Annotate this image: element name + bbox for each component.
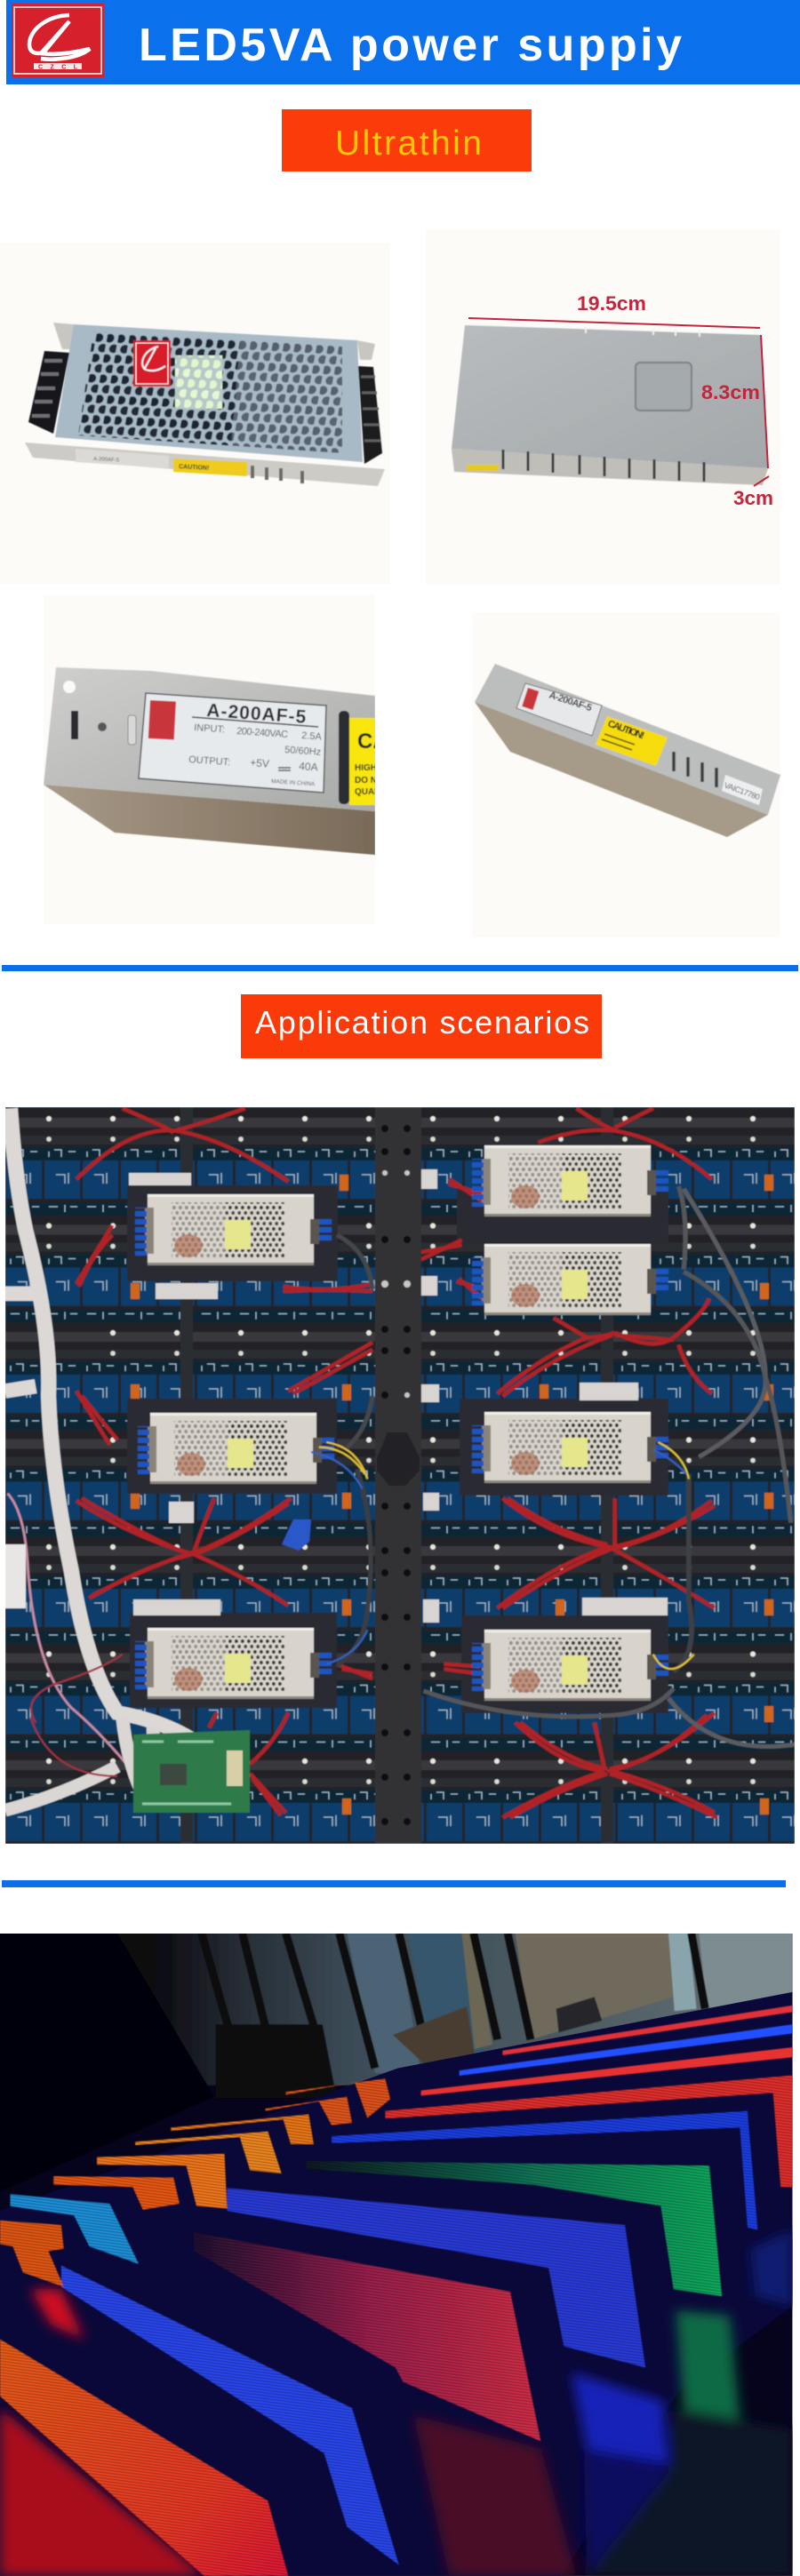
product photo: dimensions [426,229,780,585]
side label: A-200AF-5 [548,690,593,714]
side label [516,683,602,736]
heading: Application scenarios: Application scenarios [255,1004,589,1041]
display: mid blue [227,2188,645,2368]
title: LED5VA power suppiy [139,20,682,71]
serial tag [722,775,763,805]
power supply: lower right [472,1630,668,1701]
dimension lines [468,318,769,486]
side caution sticker [596,716,668,766]
product photo: top view: CAUTION! [179,464,209,472]
orange chips [131,1175,773,1814]
power supply: upper left [135,1194,332,1265]
dark mounting plates [127,1185,668,1713]
dimension label: height: 8.3cm [701,381,760,403]
display: green [306,2161,722,2296]
product label [139,693,326,793]
side caution sticker: CAUTION! [606,719,645,742]
caution sticker: HIGH [355,763,377,773]
display: front orange [0,2339,288,2576]
product label: 40A [299,760,318,773]
product label: 2.5A [301,730,323,743]
caution sticker: DO N [355,776,377,786]
display: back blue [332,2111,757,2229]
product photo: top view [0,243,390,584]
dimension label: width: 19.5cm [577,292,646,315]
application photo: wired LED cabinet [5,1107,795,1844]
product label: 200-240VAC [236,726,289,740]
product label: OUTPUT: [188,754,231,768]
dimension label: depth: 3cm [733,487,773,509]
product label: 50/60Hz [284,745,322,758]
white junction block [5,1544,26,1608]
product photo: label closeup [44,666,375,856]
logo [12,4,104,77]
LED display showcase photo [0,1934,792,2576]
blue connector [282,1519,311,1551]
product label: +5V [250,756,269,770]
red wire bundles [76,1108,716,1817]
product label: INPUT: [194,722,225,735]
caution sticker: CA [357,730,388,754]
LED pixel scanline overlay [0,2076,792,2576]
power supply: middle right [472,1412,668,1483]
heading: Ultrathin [282,109,532,171]
divider [2,1880,786,1887]
display: crimson [194,2232,540,2441]
product photo: angled side view [472,612,780,937]
product label: A-200AF-5 [206,700,307,728]
heading: Ultrathin: Ultrathin [335,124,482,163]
display: front blue [61,2266,399,2565]
white ribbon harness [5,1108,209,1810]
green control board [133,1730,250,1813]
flat ribbon cables [129,1169,668,1623]
product photo: top view: A-200AF-5 [93,457,120,464]
center mounting rail [375,1107,421,1844]
power supply: middle left [138,1413,334,1484]
dark cabinet frames [0,1992,792,2576]
product label: MADE IN CHINA [271,778,316,787]
serial tag: VAIC17780 [723,780,761,802]
power supply: lower left [135,1628,332,1699]
heading: Application scenarios [241,994,602,1058]
power supply: upper right [472,1145,668,1216]
caution sticker [348,718,375,806]
floor reflections [0,2229,792,2576]
header banner [6,0,800,84]
caution sticker: QUAL [355,787,380,797]
display: back red strips [385,2006,792,2187]
display: left orange and cyan row [0,2078,390,2287]
logo: CZCL [38,64,78,71]
divider [2,965,798,971]
warehouse wall [0,1934,792,2192]
power supply: second right [472,1244,668,1315]
grey and colored cables [311,1186,795,1747]
